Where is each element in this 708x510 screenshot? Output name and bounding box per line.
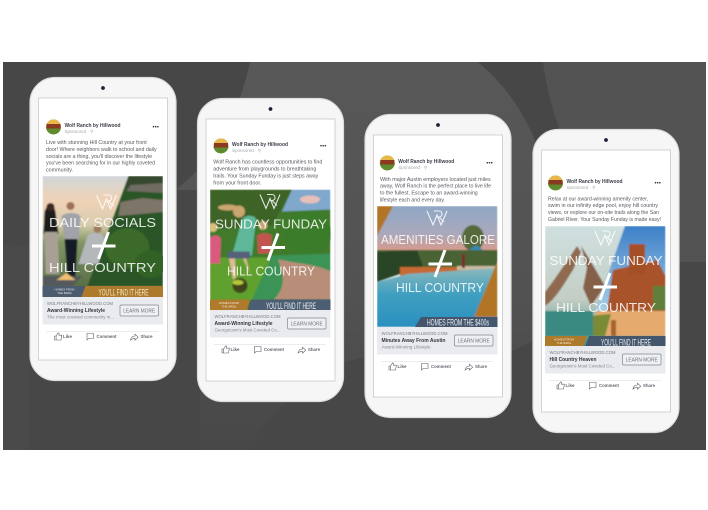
ad image: DAILY SOCIALS [49,215,156,230]
post header [46,120,159,134]
ad image: YOU'LL FIND IT HERE [601,338,651,348]
phone 2: Sunday Funday ad [198,98,344,402]
ad image: THE $400s [222,304,237,308]
post text: socials are a thing, you'll discover the lifestyle [46,154,152,160]
ad image: HILL COUNTRY [49,260,156,275]
post text [380,177,491,204]
ad footer: Minutes Away From Austin [382,338,446,344]
post text: Wolf Ranch has countless opportunities to find [213,160,322,166]
post text: away, Wolf Ranch is the perfect place to live life [380,184,491,190]
ad image: THE $400s [57,291,72,295]
ad footer [377,327,498,370]
ad image: THE $400s [557,341,572,345]
ad footer: Award-Winning Lifestyle [382,344,431,350]
post text: lifestyle each and every day. [380,198,445,204]
ad footer [210,310,330,353]
ad footer: Georgetown's Most Coveted Co... [550,364,616,370]
ad image: HOMES FROM THE $400s [427,318,489,328]
ad image: HOMES FROM [554,338,575,342]
ad footer: WOLFRANCHBYHILLWOOD.COM [382,331,448,337]
post text: you've been searching for in our highly coveted [46,161,155,167]
ad image [545,226,666,348]
ad footer: WOLFRANCHBYHILLWOOD.COM [214,314,280,320]
ad footer [42,297,163,340]
post text: to the fullest. Escape to an award-winning [380,190,478,196]
ad image: YOU'LL FIND IT HERE [266,301,316,312]
ad image: HOMES FROM [219,301,240,305]
post text: Live with stunning Hill Country at your front [46,140,147,146]
ad footer [545,346,666,389]
post text: door! Where neighbors walk to school and daily [46,147,157,153]
post text [548,196,661,223]
ad footer: Hill Country Heaven [550,357,597,363]
ad image: AMENITIES GALORE [381,232,495,247]
phone 3: Amenities Galore ad [365,114,511,418]
post header [380,156,492,170]
ad image: HOMES FROM [55,288,75,292]
ad image [208,190,332,312]
ad footer: The most coveted community in... [47,314,114,320]
post header [548,176,661,190]
post text: from your front door. [213,180,262,186]
ad image [42,176,166,298]
background panel [3,62,706,450]
ad footer: Georgetown's Most Coveted Co... [214,328,280,334]
post text: views, or explore our on-site trails along the San [548,210,659,216]
ad image: YOU'LL FIND IT HERE [98,288,148,298]
ad footer: Award-Winning Lifestyle [214,321,272,327]
ad footer: WOLFRANCHBYHILLWOOD.COM [550,350,616,356]
post text [46,140,157,173]
post text: swim in our infinity edge pool, enjoy hill country [548,203,658,209]
ad image: SUNDAY FUNDAY [215,216,327,232]
phone 4: Hill Country Heaven ad [533,130,679,432]
post text: adventure from playgrounds to breathtaking [213,167,316,173]
post header [214,138,326,154]
phone 1: Daily Socials ad [30,78,176,380]
post text: With major Austin employers located just miles [380,177,491,183]
ad footer: Award-Winning Lifestyle [47,308,105,314]
ad image: SUNDAY FUNDAY [550,253,663,268]
ad image [377,206,498,328]
post text: trails. Your Sunday Funday is just steps away [213,174,318,180]
ad image: HILL COUNTRY [227,264,315,278]
ad footer: WOLFRANCHBYHILLWOOD.COM [47,301,113,307]
post text: Relax at our award-winning amenity center, [548,196,648,202]
ad image: HILL COUNTRY [556,300,656,315]
post text [213,160,322,186]
post text: community. [46,167,73,173]
ad image: HILL COUNTRY [396,280,484,295]
post text: Gabriel River. Your Sunday Funday is made easy! [548,217,661,223]
